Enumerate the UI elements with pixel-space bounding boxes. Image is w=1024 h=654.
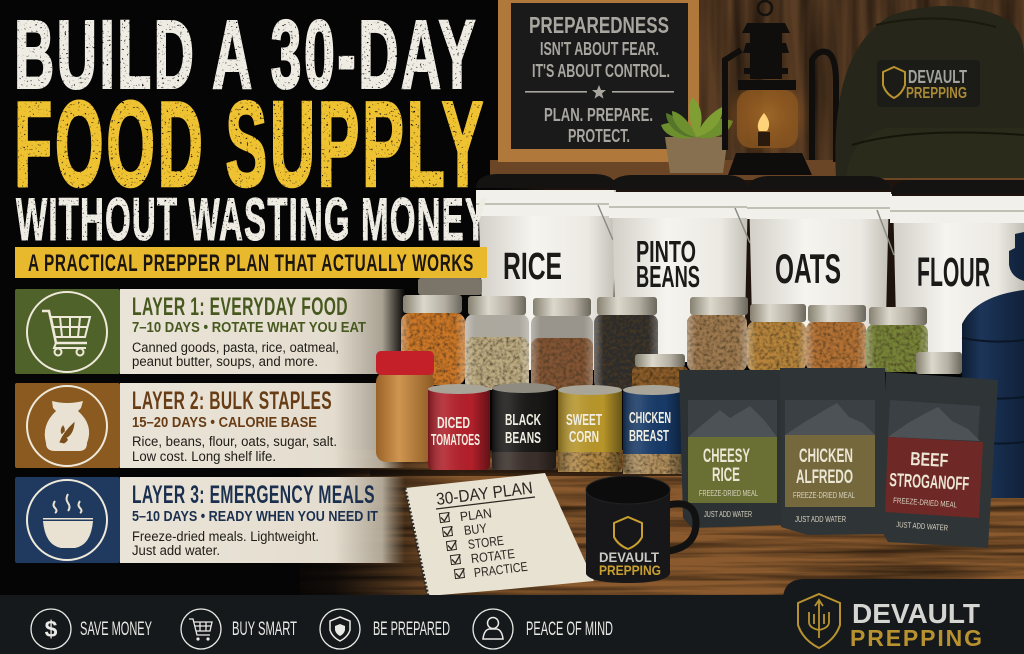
pouch title line 2: RICE — [712, 465, 740, 486]
footer item: buy smart — [181, 609, 297, 649]
icon: grain sack — [27, 386, 107, 466]
pouch descriptor: FREEZE-DRIED MEAL — [893, 496, 958, 509]
beans label: BEANS — [636, 259, 700, 294]
peanut butter jar — [376, 351, 434, 462]
icon: shopping cart — [27, 292, 107, 372]
pouch title line 2: STROGANOFF — [889, 470, 970, 495]
layer 1 body line 2: peanut butter, soups, and more. — [132, 354, 318, 369]
mug — [586, 476, 696, 583]
checklist: plan: PLAN — [459, 505, 493, 524]
footer item: peace of mind — [473, 609, 613, 649]
sign line 4: PROTECT. — [568, 126, 630, 146]
jar: orange beans — [401, 295, 465, 385]
potted plant — [661, 97, 733, 173]
layer 3 subtitle: 5–10 DAYS • READY WHEN YOU NEED IT — [132, 509, 378, 525]
label chicken: CHICKEN — [629, 410, 671, 427]
logo subname: PREPPING — [850, 625, 982, 651]
sign line 2: IT'S ABOUT CONTROL. — [532, 61, 670, 81]
jar: tan legumes — [687, 297, 748, 372]
sign divider with star — [525, 85, 674, 99]
title line 1: BUILD A 30-DAY — [14, 0, 478, 109]
label black: BLACK — [505, 412, 541, 429]
footer item: save money — [31, 609, 152, 649]
label sweet: SWEET — [566, 412, 602, 429]
layer 1 subtitle: 7–10 DAYS • ROTATE WHAT YOU EAT — [132, 320, 366, 336]
label corn: CORN — [569, 429, 599, 446]
jar: light grain — [465, 296, 529, 390]
footer item: be prepared — [320, 609, 450, 649]
pouch descriptor: FREEZE-DRIED MEAL — [793, 491, 855, 500]
panel: layer 1 everyday food — [15, 289, 405, 374]
pinto label: PINTO — [636, 234, 696, 269]
sign line 3: PLAN. PREPARE. — [544, 105, 653, 125]
banner text: A PRACTICAL PREPPER PLAN THAT ACTUALLY WORKS — [28, 250, 474, 277]
panel: layer 3 emergency meals — [15, 477, 405, 563]
title line 2: FOOD SUPPLY — [14, 76, 486, 212]
shelf — [490, 160, 1024, 180]
icon: steaming bowl — [27, 480, 107, 560]
water jug — [962, 232, 1024, 498]
layer 2 body line 2: Low cost. Long shelf life. — [132, 449, 276, 464]
checklist: rotate: ROTATE — [470, 546, 516, 566]
jar back lid — [418, 278, 482, 295]
layer 2 body: Rice, beans, flour, oats, sugar, salt. — [132, 434, 337, 449]
pouch title line 1: BEEF — [910, 449, 949, 472]
checklist: plan — [439, 505, 493, 527]
label diced: DICED — [437, 415, 470, 432]
wooden table — [280, 362, 1024, 597]
jar: almonds — [806, 305, 866, 372]
flame — [758, 113, 769, 131]
jar: black beans — [594, 297, 658, 390]
mug logo shield — [614, 517, 642, 549]
layer 3 body line 2: Just add water. — [132, 543, 220, 558]
bucket: rice — [476, 174, 616, 370]
checklist: rotate — [450, 546, 516, 569]
patch name: DEVAULT — [908, 67, 967, 87]
checklist: buy: BUY — [463, 520, 488, 538]
footer item: save money: SAVE MONEY — [80, 619, 152, 640]
footer item: save money: $ — [45, 616, 58, 642]
notebook: 30-day plan — [405, 473, 594, 596]
pouch title line 1: CHICKEN — [799, 446, 853, 467]
can: sweet corn — [558, 385, 622, 472]
pouch note: JUST ADD WATER — [896, 520, 949, 533]
checklist: store — [446, 533, 505, 555]
bucket: flour — [890, 180, 1024, 362]
logo: devault prepping — [798, 594, 982, 651]
mug name: DEVAULT — [599, 549, 659, 565]
patch shield — [883, 67, 905, 98]
layer 2 title: LAYER 2: BULK STAPLES — [132, 387, 332, 415]
small jar right — [916, 352, 962, 374]
logo name: DEVAULT — [852, 598, 980, 629]
pouch title line 1: CHEESY — [703, 446, 750, 467]
footer item: be prepared: BE PREPARED — [373, 619, 450, 640]
footer item: peace of mind: PEACE OF MIND — [526, 619, 613, 640]
bucket: oats — [747, 176, 894, 362]
pouch: cheesy rice — [679, 370, 783, 528]
can: black beans — [492, 383, 556, 470]
label tomatoes: TOMATOES — [431, 432, 480, 449]
checklist: buy — [442, 520, 488, 541]
pouch: beef stroganoff — [881, 372, 998, 548]
pouch descriptor: FREEZE-DRIED MEAL — [699, 489, 758, 498]
jar: brown lentils — [531, 298, 593, 390]
mug subname: PREPPING — [599, 562, 661, 578]
rice label: RICE — [503, 246, 562, 288]
sign heading: PREPAREDNESS — [529, 12, 669, 38]
panel: layer 2 bulk staples — [15, 383, 405, 468]
layer 3 body: Freeze-dried meals. Lightweight. — [132, 529, 319, 544]
subtitle banner — [15, 247, 487, 278]
footer bar — [0, 579, 1024, 654]
layer 1 title: LAYER 1: EVERYDAY FOOD — [132, 293, 348, 321]
pouch: chicken alfredo — [780, 368, 888, 535]
checklist: practice: PRACTICE — [473, 559, 529, 580]
title line 3: WITHOUT WASTING MONEY — [16, 186, 488, 253]
sign line 1: ISN'T ABOUT FEAR. — [540, 39, 659, 59]
pouch note: JUST ADD WATER — [795, 515, 846, 524]
layer 1 body: Canned goods, pasta, rice, oatmeal, — [132, 340, 339, 355]
checklist: store: STORE — [467, 533, 505, 552]
chalkboard sign — [498, 0, 699, 162]
jar: golden grains — [747, 304, 806, 372]
oats label: OATS — [775, 245, 841, 292]
small jar — [632, 354, 688, 390]
title: headline lines — [14, 0, 488, 253]
pouch note: JUST ADD WATER — [704, 510, 752, 519]
pouch title line 2: ALFREDO — [796, 467, 853, 488]
lantern — [722, 1, 836, 175]
layer 2 subtitle: 15–20 DAYS • CALORIE BASE — [132, 415, 317, 431]
can: diced tomatoes — [428, 384, 490, 470]
layer 3 title: LAYER 3: EMERGENCY MEALS — [132, 481, 375, 509]
bucket: pinto beans — [609, 175, 750, 362]
label beans: BEANS — [505, 430, 541, 447]
notebook title: 30-DAY PLAN — [435, 478, 534, 509]
footer item: buy smart: BUY SMART — [232, 619, 297, 640]
can: chicken breast — [623, 385, 683, 474]
label breast: BREAST — [629, 428, 669, 445]
jar: green peas — [866, 307, 928, 372]
backpack — [835, 6, 1024, 178]
checklist: practice — [454, 559, 529, 583]
patch subname: PREPPING — [906, 85, 967, 102]
